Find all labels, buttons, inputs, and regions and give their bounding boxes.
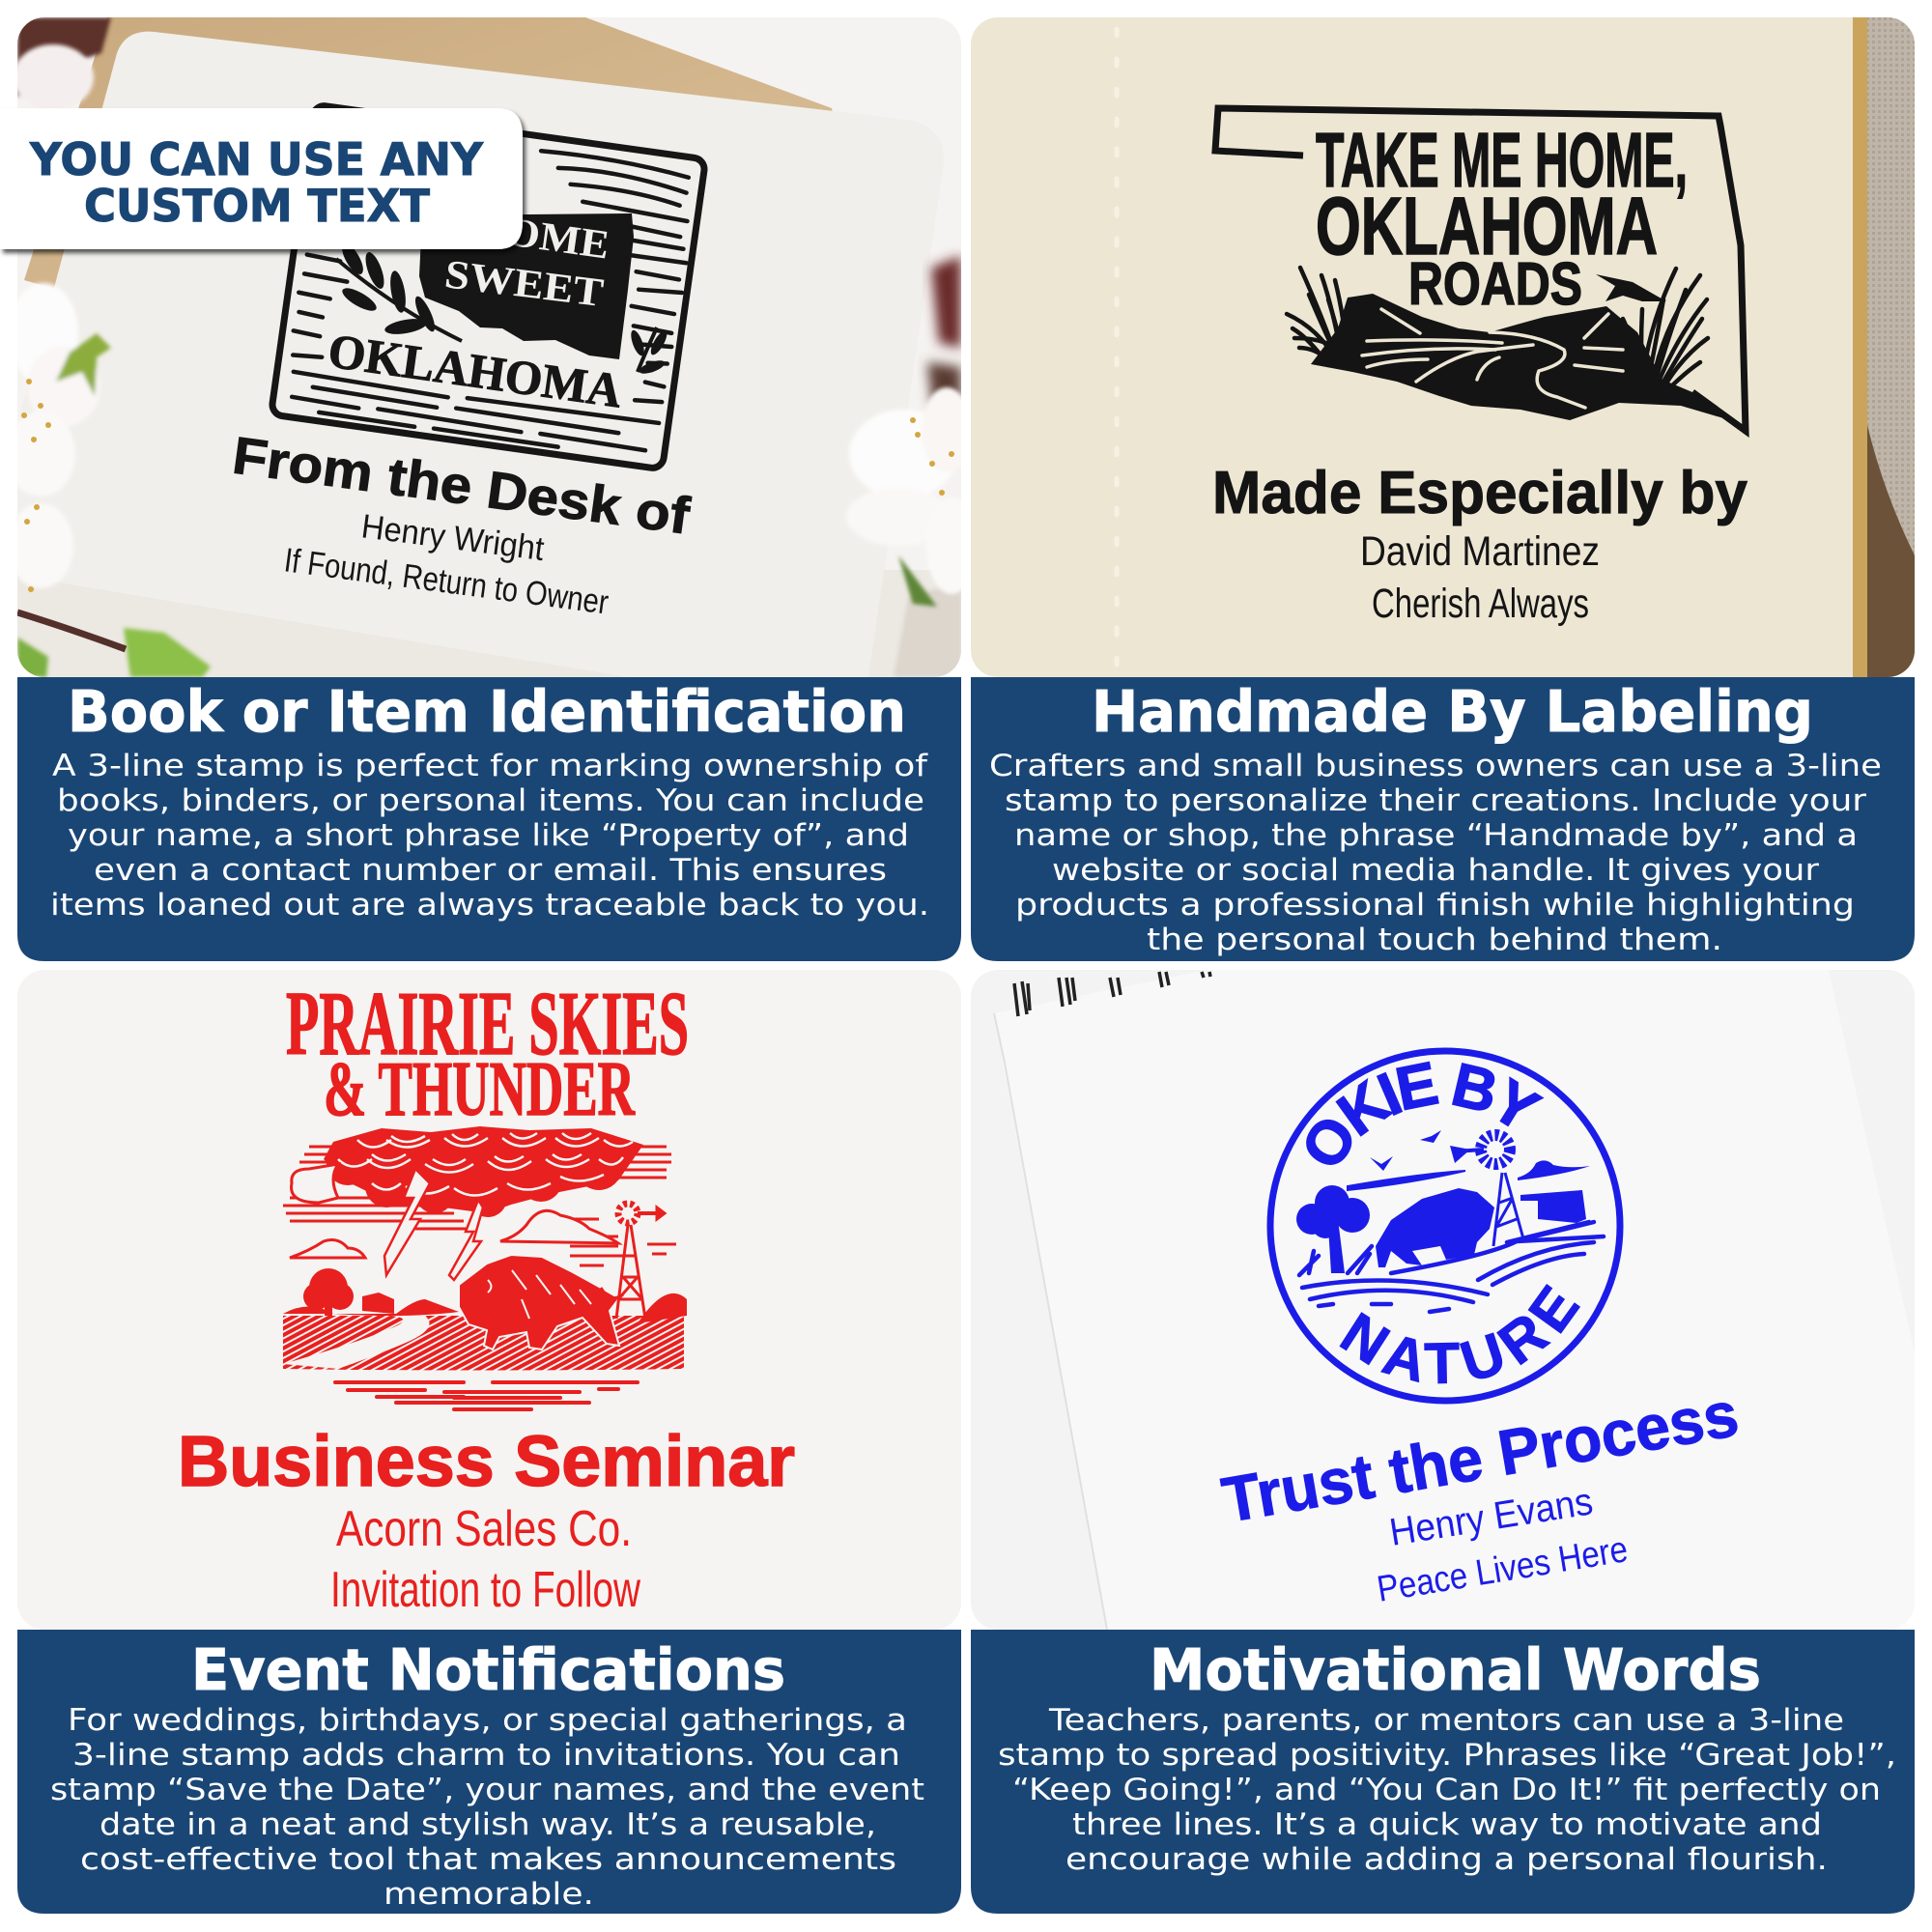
body text: memorable. (384, 1877, 594, 1912)
body text: Teachers, parents, or mentors can use a 3-line (1048, 1703, 1844, 1738)
caption panel (17, 1630, 961, 1914)
body text (998, 1703, 1896, 1877)
water lines (335, 1382, 638, 1409)
stamp text lines (182, 1433, 795, 1607)
body text: “Keep Going!”, and “You Can Do It!” fit perfectly on (1012, 1773, 1881, 1807)
oklahoma silhouette (419, 213, 634, 359)
stamp text lines: Invitation to Follow (330, 1562, 640, 1618)
photo: blue stamp on spiral notebook (971, 970, 1915, 1630)
body text: encourage while adding a personal flourish. (1065, 1842, 1828, 1877)
stamp heading letters (286, 993, 688, 1117)
body text: cost-effective tool that makes announcements (80, 1842, 896, 1877)
panel: book or item identification (6, 17, 977, 961)
body text: items loaned out are always traceable back to you. (50, 888, 929, 923)
stamp text lines: Cherish Always (1372, 581, 1589, 627)
oklahoma outline (1215, 108, 1746, 431)
body text: products a professional finish while highlighting (1015, 888, 1855, 923)
body text: Crafters and small business owners can use a 3-line (989, 749, 1882, 783)
panel: handmade by labeling (971, 17, 1915, 961)
stamp text lines: Acorn Sales Co. (336, 1501, 632, 1557)
body text (989, 749, 1882, 957)
callout: custom text badge: YOU CAN USE ANY (29, 133, 484, 185)
illustration: hills, road and grass (1287, 268, 1730, 420)
card (54, 31, 884, 677)
caption panel (17, 677, 961, 961)
stamp text lines (234, 437, 693, 613)
caption panel (971, 1630, 1915, 1914)
round badge stamp: OKIE BY (1306, 1061, 1544, 1165)
spiral binding (1014, 972, 1210, 1016)
photo: stamped card on kraft envelope (6, 17, 977, 677)
stamp heading letters: ROADS (1408, 251, 1582, 318)
body text: three lines. It’s a quick way to motivate and (1072, 1807, 1822, 1842)
body text (50, 1703, 924, 1912)
bison (1376, 1188, 1494, 1267)
stamp: wooden sign: OKLAHOMA (325, 323, 625, 417)
body text: For weddings, birthdays, or special gatherings, a (68, 1703, 907, 1738)
body text (50, 749, 929, 923)
heading: Handmade By Labeling (1092, 678, 1813, 745)
stamp text lines: Business Seminar (178, 1421, 795, 1501)
ground lines (1299, 1222, 1604, 1312)
flowers (6, 283, 977, 677)
sky details (1348, 1130, 1590, 1223)
panel: motivational words (971, 970, 1915, 1914)
stamp text lines: Henry Wright (359, 507, 547, 568)
body text: the personal touch behind them. (1147, 923, 1722, 957)
round badge stamp (1267, 1047, 1623, 1405)
stamp: wooden sign: HOME (470, 205, 612, 269)
stamp text lines (1212, 460, 1747, 627)
callout: custom text badge (0, 108, 523, 249)
bison (459, 1255, 619, 1350)
stamp heading letters: OKLAHOMA (1316, 181, 1658, 271)
stamp text lines: Peace Lives Here (1375, 1529, 1631, 1610)
stamp text lines (1219, 1403, 1738, 1602)
caption panel (971, 677, 1915, 961)
photo: red stamp on white paper (17, 970, 961, 1630)
stamp text lines: David Martinez (1360, 528, 1600, 575)
round badge stamp: NATURE (1339, 1284, 1580, 1383)
stamp text lines: Trust the Process (1217, 1378, 1744, 1536)
illustration: storm, bison and windmill (283, 1126, 687, 1409)
tree and barn (303, 1268, 354, 1321)
body text: date in a neat and stylish way. It’s a reusable, (99, 1807, 876, 1842)
heading: Motivational Words (1150, 1636, 1761, 1703)
field hatch (283, 1316, 684, 1370)
heading: Event Notifications (191, 1636, 785, 1703)
stamp heading letters: PRAIRIE SKIES (286, 974, 689, 1074)
body text: books, binders, or personal items. You can include (57, 783, 924, 818)
body text: stamp to spread positivity. Phrases like “Great Job!”, (998, 1738, 1896, 1773)
body text: name or shop, the phrase “Handmade by”, and a (1014, 818, 1858, 853)
body text: A 3-line stamp is perfect for marking ownership of (52, 749, 928, 783)
body text: even a contact number or email. This ensures (94, 853, 887, 888)
body text: your name, a short phrase like “Property of”, and (68, 818, 909, 853)
dark blossoms right (931, 256, 961, 348)
heading: Book or Item Identification (68, 678, 906, 745)
stamp heading letters (1316, 131, 1685, 305)
stamp heading letters: TAKE ME HOME, (1316, 117, 1688, 203)
callout: custom text badge: CUSTOM TEXT (84, 180, 431, 232)
stamp heading letters: & THUNDER (324, 1047, 636, 1132)
stamp text lines: Henry Evans (1387, 1480, 1596, 1554)
panel: event notifications (17, 970, 961, 1914)
stamp: wooden sign (270, 104, 706, 469)
tree (1296, 1185, 1370, 1273)
body text: stamp to personalize their creations. Include your (1005, 783, 1866, 818)
body text: stamp “Save the Date”, your names, and the event (50, 1773, 924, 1807)
notebook page (994, 970, 1915, 1630)
windmill (616, 1204, 665, 1319)
stamp: wooden sign: SWEET (442, 252, 606, 316)
stamp text lines: From the Desk of (229, 426, 694, 546)
body text: website or social media handle. It gives your (1052, 853, 1819, 888)
stamp text lines: If Found, Return to Owner (282, 541, 611, 622)
windmill (1465, 1129, 1524, 1246)
photo: cream paper with stamp (971, 17, 1915, 677)
body text: 3-line stamp adds charm to invitations. You can (72, 1738, 900, 1773)
stamp text lines: Made Especially by (1212, 460, 1747, 526)
leaf sprigs (336, 241, 669, 376)
